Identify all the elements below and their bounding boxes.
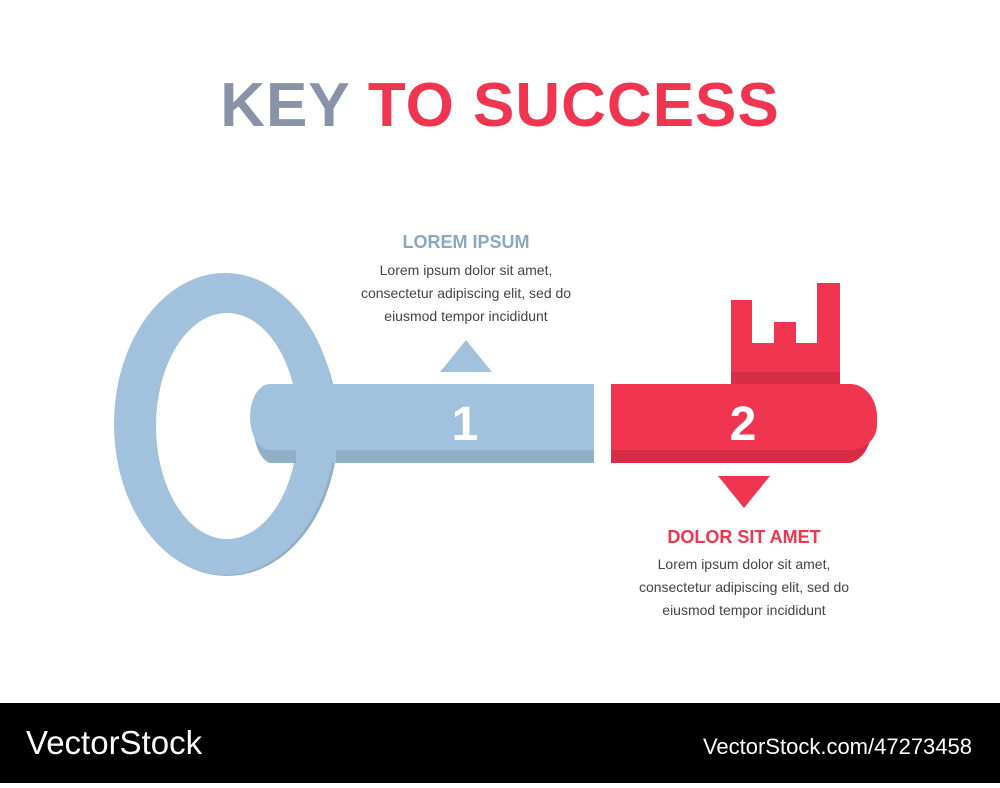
text block 1 — [361, 232, 571, 324]
text block 1: consectetur adipiscing elit, sed do — [361, 285, 571, 301]
footer bar: VectorStock.com/47273458 — [703, 734, 972, 759]
text block 2: consectetur adipiscing elit, sed do — [639, 579, 849, 595]
arrow up (blue) — [440, 340, 492, 372]
number 1: 1 — [452, 398, 478, 451]
text block 2: Lorem ipsum dolor sit amet, — [658, 556, 830, 572]
key shaft (blue) — [250, 384, 594, 463]
text block 2: DOLOR SIT AMET — [667, 527, 821, 547]
footer bar: VectorStock — [26, 724, 203, 761]
footer bar — [0, 703, 1000, 783]
text block 2 — [639, 527, 849, 618]
text block 2: eiusmod tempor incididunt — [662, 602, 826, 618]
number 2: 2 — [730, 398, 756, 451]
text block 1: Lorem ipsum dolor sit amet, — [380, 262, 552, 278]
text block 1: eiusmod tempor incididunt — [384, 308, 548, 324]
arrow down (red) — [718, 476, 770, 508]
text block 1: LOREM IPSUM — [402, 232, 530, 252]
key bit (red) — [611, 283, 877, 463]
key ring (blue) — [114, 273, 338, 576]
title: KEY TO SUCCESS — [220, 71, 780, 140]
